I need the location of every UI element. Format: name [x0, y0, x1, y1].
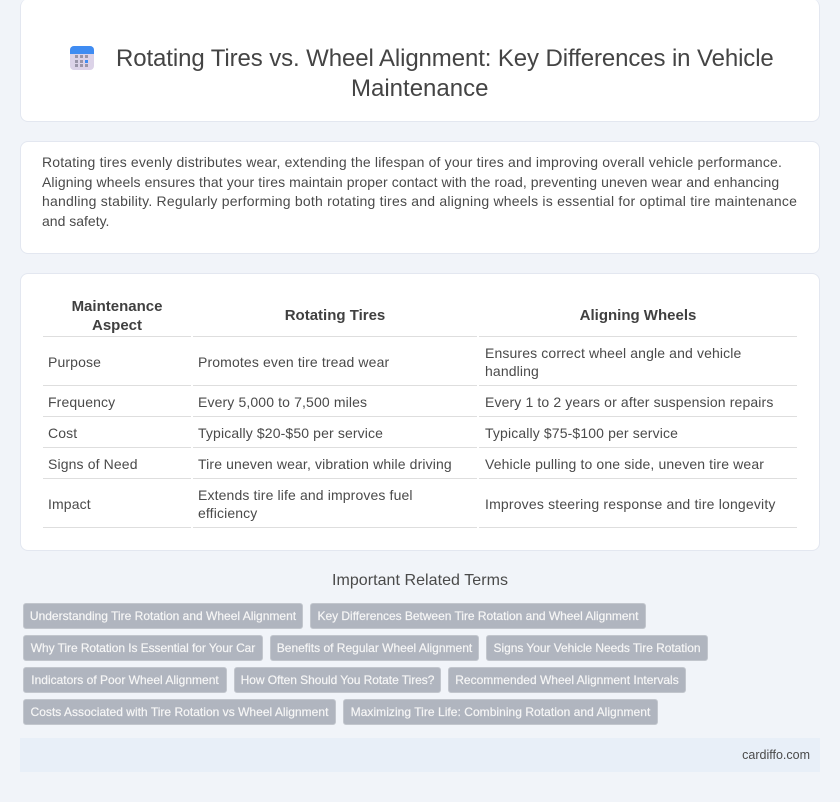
- row: Signs of Need: Signs of Need: [48, 456, 138, 472]
- tag: Key Differences Between Tire Rotation and Wheel Alignment: [318, 609, 638, 623]
- tag: [23, 603, 303, 629]
- tag: [310, 603, 646, 629]
- comparison table contents: Extends tire life and improves fuel: [198, 487, 413, 503]
- intro text: Rotating tires evenly distributes wear, extending the lifespan of your tires and improving overall vehicle performance.: [42, 154, 782, 170]
- tag: Why Tire Rotation Is Essential for Your Car: [31, 641, 255, 655]
- panel: comparison table: [20, 273, 820, 551]
- header: Maintenance Aspect: Aspect: [92, 317, 142, 334]
- tag: [270, 635, 479, 661]
- row: Frequency: Frequency: [48, 394, 115, 410]
- row: Purpose: Purpose: [48, 354, 101, 370]
- tag: [23, 699, 336, 725]
- panel: introduction: [20, 141, 820, 254]
- tag: Recommended Wheel Alignment Intervals: [455, 673, 679, 687]
- intro text: Aligning wheels ensures that your tires maintain proper contact with the road, preventing uneven wear and enhancing: [42, 174, 779, 190]
- title: [116, 45, 774, 102]
- panel: title header: [20, 0, 820, 122]
- tag: [448, 667, 686, 693]
- comparison table contents: handling: [485, 363, 539, 379]
- tag: Costs Associated with Tire Rotation vs Wheel Alignment: [31, 705, 328, 719]
- tag: [23, 635, 263, 661]
- footer bar: [20, 738, 820, 772]
- tag: [23, 667, 227, 693]
- comparison table contents: Tire uneven wear, vibration while driving: [198, 456, 452, 472]
- comparison table contents: Every 5,000 to 7,500 miles: [198, 394, 367, 410]
- intro text: [42, 154, 797, 229]
- comparison table contents: Promotes even tire tread wear: [198, 354, 389, 370]
- title: Rotating Tires vs. Wheel Alignment: Key Differences in Vehicle: [116, 45, 774, 72]
- related term tags: [23, 603, 708, 725]
- tag: [234, 667, 441, 693]
- comparison table contents: efficiency: [198, 505, 257, 521]
- tag: [486, 635, 708, 661]
- comparison table contents: Typically $75-$100 per service: [485, 425, 678, 441]
- intro text: handling stability. Regularly performing both rotating tires and aligning wheels is essential for optimal tire maintenance: [42, 193, 797, 209]
- tag: Understanding Tire Rotation and Wheel Alignment: [30, 609, 296, 623]
- heading: Important Related Terms: Important Related Terms: [332, 572, 508, 589]
- tag: Signs Your Vehicle Needs Tire Rotation: [494, 641, 700, 655]
- header: Aligning Wheels: Aligning Wheels: [580, 307, 696, 324]
- title: Maintenance: [351, 75, 488, 102]
- row: Cost: Cost: [48, 425, 77, 441]
- header: Maintenance Aspect: Maintenance: [72, 298, 162, 315]
- header: Rotating Tires: Rotating Tires: [285, 307, 385, 324]
- tag: Maximizing Tire Life: Combining Rotation and Alignment: [351, 705, 650, 719]
- comparison table contents: Vehicle pulling to one side, uneven tire wear: [485, 456, 764, 472]
- icon: calendar app: [70, 46, 94, 70]
- comparison table contents: Ensures correct wheel angle and vehicle: [485, 345, 741, 361]
- tag: [343, 699, 658, 725]
- tag: Benefits of Regular Wheel Alignment: [277, 641, 472, 655]
- comparison table contents: Every 1 to 2 years or after suspension repairs: [485, 394, 773, 410]
- intro text: and safety.: [42, 213, 109, 229]
- header: Maintenance Aspect: [72, 298, 162, 334]
- comparison table contents: [43, 298, 797, 528]
- footer source: cardiffo.com: [742, 748, 810, 762]
- comparison table contents: Typically $20-$50 per service: [198, 425, 383, 441]
- tag: How Often Should You Rotate Tires?: [241, 673, 434, 687]
- row: Impact: Impact: [48, 496, 91, 512]
- comparison table contents: Improves steering response and tire longevity: [485, 496, 776, 512]
- tag: Indicators of Poor Wheel Alignment: [31, 673, 219, 687]
